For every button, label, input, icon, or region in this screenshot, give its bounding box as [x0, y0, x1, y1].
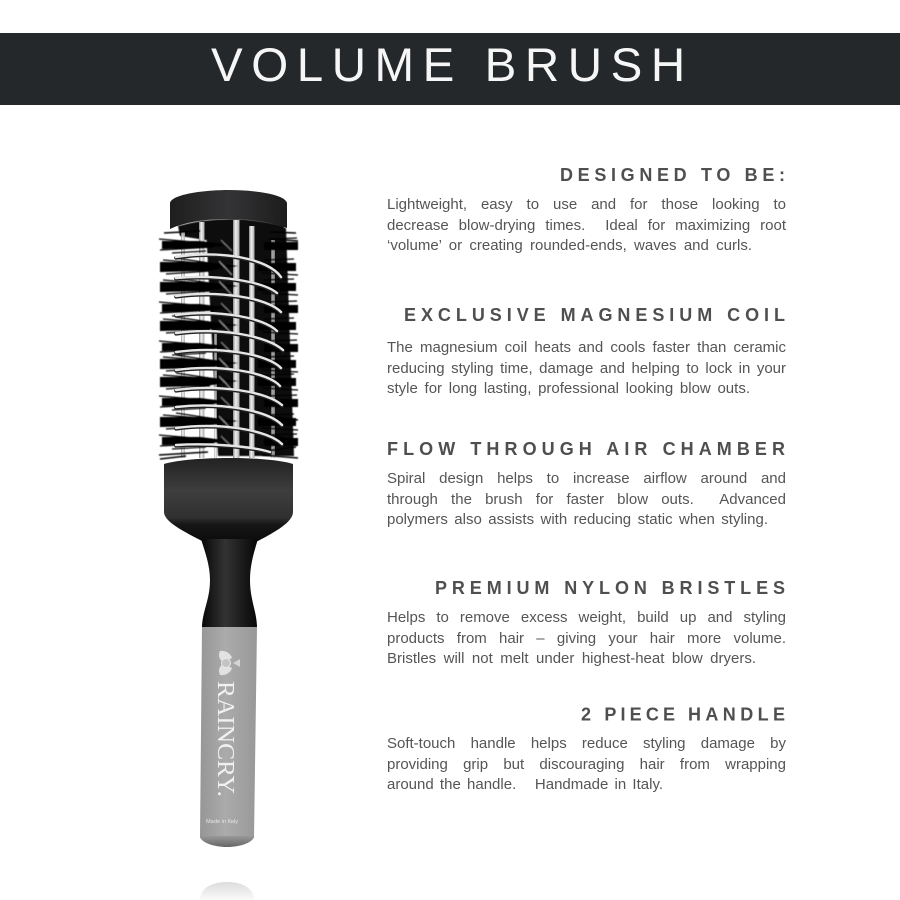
support rods [181, 220, 275, 458]
text: flow through air chamber: Spiral design helps to increase airflow around and [387, 470, 786, 487]
heading: flow through air chamber: FLOW THROUGH AIR CHAMBER [387, 439, 785, 459]
heading: 2 piece handle [581, 704, 785, 724]
text: flow through air chamber: polymers also assists with reducing static when styling. [387, 511, 768, 528]
brush product illustration [158, 190, 299, 898]
text: flow through air chamber: through the brush for faster blow outs. Advanced [387, 490, 786, 508]
brand name: RAINCRY. [212, 681, 239, 797]
text: 2 piece handle: around the handle. Handmade in Italy. [387, 776, 663, 793]
text: 2 piece handle [387, 735, 786, 793]
section: premium nylon bristles [387, 578, 786, 667]
section: designed to be [387, 165, 786, 254]
heading: exclusive magnesium coil: EXCLUSIVE MAGNESIUM COIL [404, 305, 785, 325]
bristle rows [159, 231, 298, 459]
handle end cap [200, 836, 254, 847]
heading: premium nylon bristles: PREMIUM NYLON BRISTLES [435, 578, 785, 598]
section: flow through air chamber [387, 439, 786, 528]
text: designed to be: Lightweight, easy to use and for those looking to [387, 196, 786, 213]
heading: 2 piece handle: HANDLE [688, 704, 785, 724]
text: exclusive magnesium coil: style for long lasting, professional looking blow outs. [387, 380, 750, 397]
text: flow through air chamber [387, 470, 786, 528]
top cap [170, 190, 287, 229]
text: premium nylon bristles [387, 609, 786, 667]
heading: designed to be: DESIGNED TO BE: [560, 165, 785, 185]
made in italy label: Made in Italy [206, 819, 238, 825]
text: 2 piece handle: providing grip but discouraging hair from wrapping [387, 756, 786, 772]
text: designed to be: ‘volume’ or creating rounded-ends, waves and curls. [387, 237, 752, 254]
text: premium nylon bristles: products from hair – giving your hair more volume. [387, 630, 786, 646]
section: 2 piece handle [387, 704, 786, 793]
bristle core [178, 219, 294, 456]
gray handle [200, 627, 257, 838]
brush reflection [200, 882, 254, 900]
collar [164, 458, 293, 541]
title banner: VOLUME BRUSH [211, 39, 694, 92]
text: premium nylon bristles: Bristles will not melt under highest-heat blow dryers. [387, 650, 756, 667]
spiral magnesium coil [176, 254, 283, 453]
section: exclusive magnesium coil [387, 305, 786, 397]
text: designed to be: decrease blow-drying times. Ideal for maximizing root [387, 216, 786, 234]
text: designed to be [387, 196, 786, 254]
heading: 2 piece handle: 2 PIECE [581, 704, 675, 724]
text: exclusive magnesium coil: The magnesium coil heats and cools faster than ceramic [387, 339, 786, 356]
text: premium nylon bristles: Helps to remove excess weight, build up and styling [387, 609, 786, 626]
text: exclusive magnesium coil: reducing styling time, damage and helping to lock in your [387, 360, 786, 376]
brand crest [219, 651, 240, 675]
title banner [0, 33, 900, 105]
text: 2 piece handle: Soft-touch handle helps reduce styling damage by [387, 735, 786, 752]
text: exclusive magnesium coil [387, 339, 786, 397]
grip neck [201, 539, 258, 628]
